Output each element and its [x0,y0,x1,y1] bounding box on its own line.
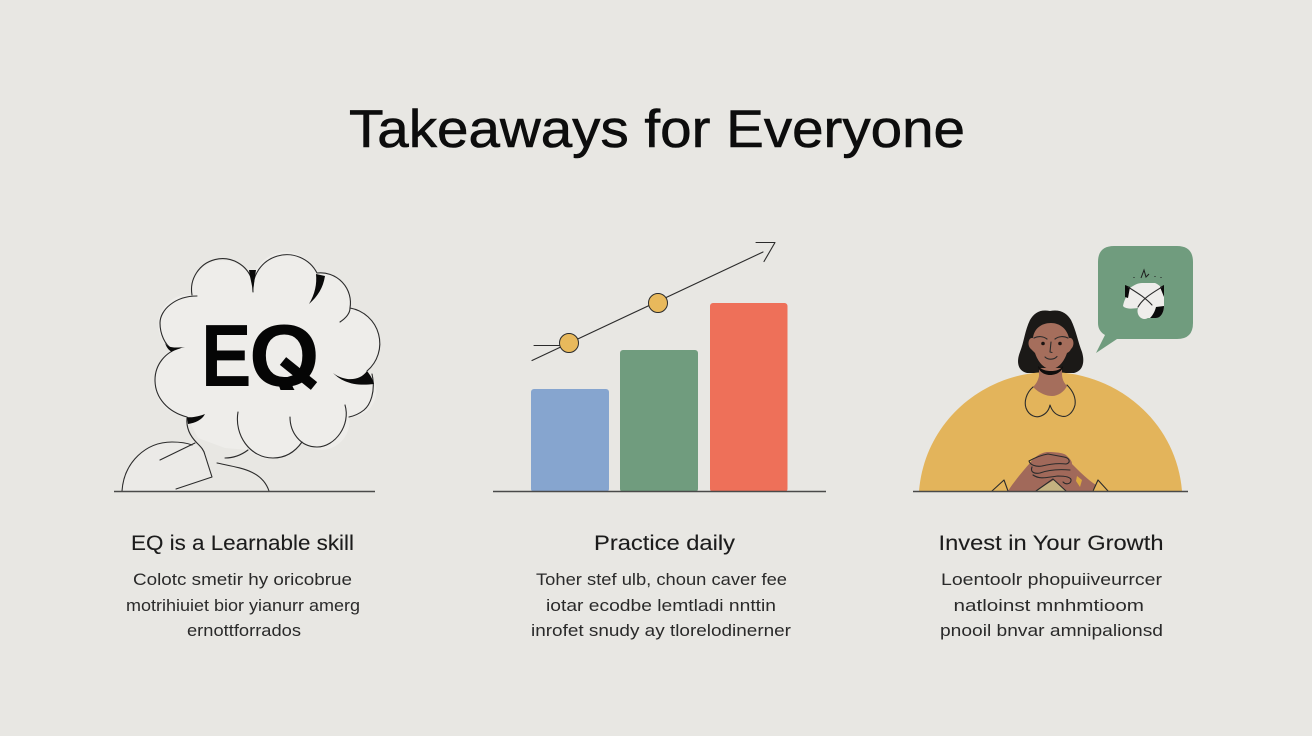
hair [1018,310,1083,373]
hands clasped [1008,452,1096,491]
black crescent accents [165,270,374,424]
collar [1025,385,1075,417]
heading: Practice daily [594,532,736,555]
body text: iotar ecodbe lemtladi nnttin [546,596,776,615]
title: Takeaways for Everyone [349,100,965,159]
baseline [493,490,826,492]
shoulder and neck [122,418,269,491]
icon: head in profile with EQ thought cloud [114,252,380,492]
bar: green [620,350,698,492]
trend marker 2 [648,294,668,312]
bar: blue [531,389,609,492]
trend arrow [532,242,775,360]
speech bubble [1096,246,1193,353]
body text: pnooil bnvar amnipalionsd [940,621,1163,640]
bar: red [710,303,788,492]
EQ lettering [206,324,318,390]
EQ lettering: Q [249,306,320,405]
thought cloud [154,252,380,459]
body text: ernottforrados [187,621,301,640]
sleeve cuff right [1093,480,1108,491]
panel: practice daily [493,242,826,640]
body text [531,570,791,640]
sleeve cuff left [992,480,1008,491]
illustration: person with speech bubble [913,246,1193,492]
face [1029,323,1073,375]
icon: heart and brain glyph [1123,270,1164,319]
body text: natloinst mnhmtioom [954,596,1144,615]
trend marker 1 [560,334,578,352]
body text: Colotc smetir hy oricobrue [133,570,352,589]
EQ lettering: E [201,308,251,405]
panel: invest in your growth [913,246,1193,640]
body: yellow sweater [919,372,1182,491]
body text [126,570,360,640]
body text: Loentoolr phopuiiveurrcer [941,570,1162,589]
panel: EQ is a learnable skill [114,252,380,640]
infographic canvas [114,108,1193,640]
bar chart with rising trend arrow [493,242,826,492]
body text [940,570,1163,640]
body text: inrofet snudy ay tlorelodinerner [531,621,791,640]
heading: EQ is a Learnable skill [131,532,354,555]
neck [1033,368,1067,396]
body text: Toher stef ulb, choun caver fee [536,570,787,589]
body text: motrihiuiet bior yianurr amerg [126,596,360,615]
baseline [913,490,1188,492]
baseline [114,490,375,492]
heading: Invest in Your Growth [938,532,1164,555]
